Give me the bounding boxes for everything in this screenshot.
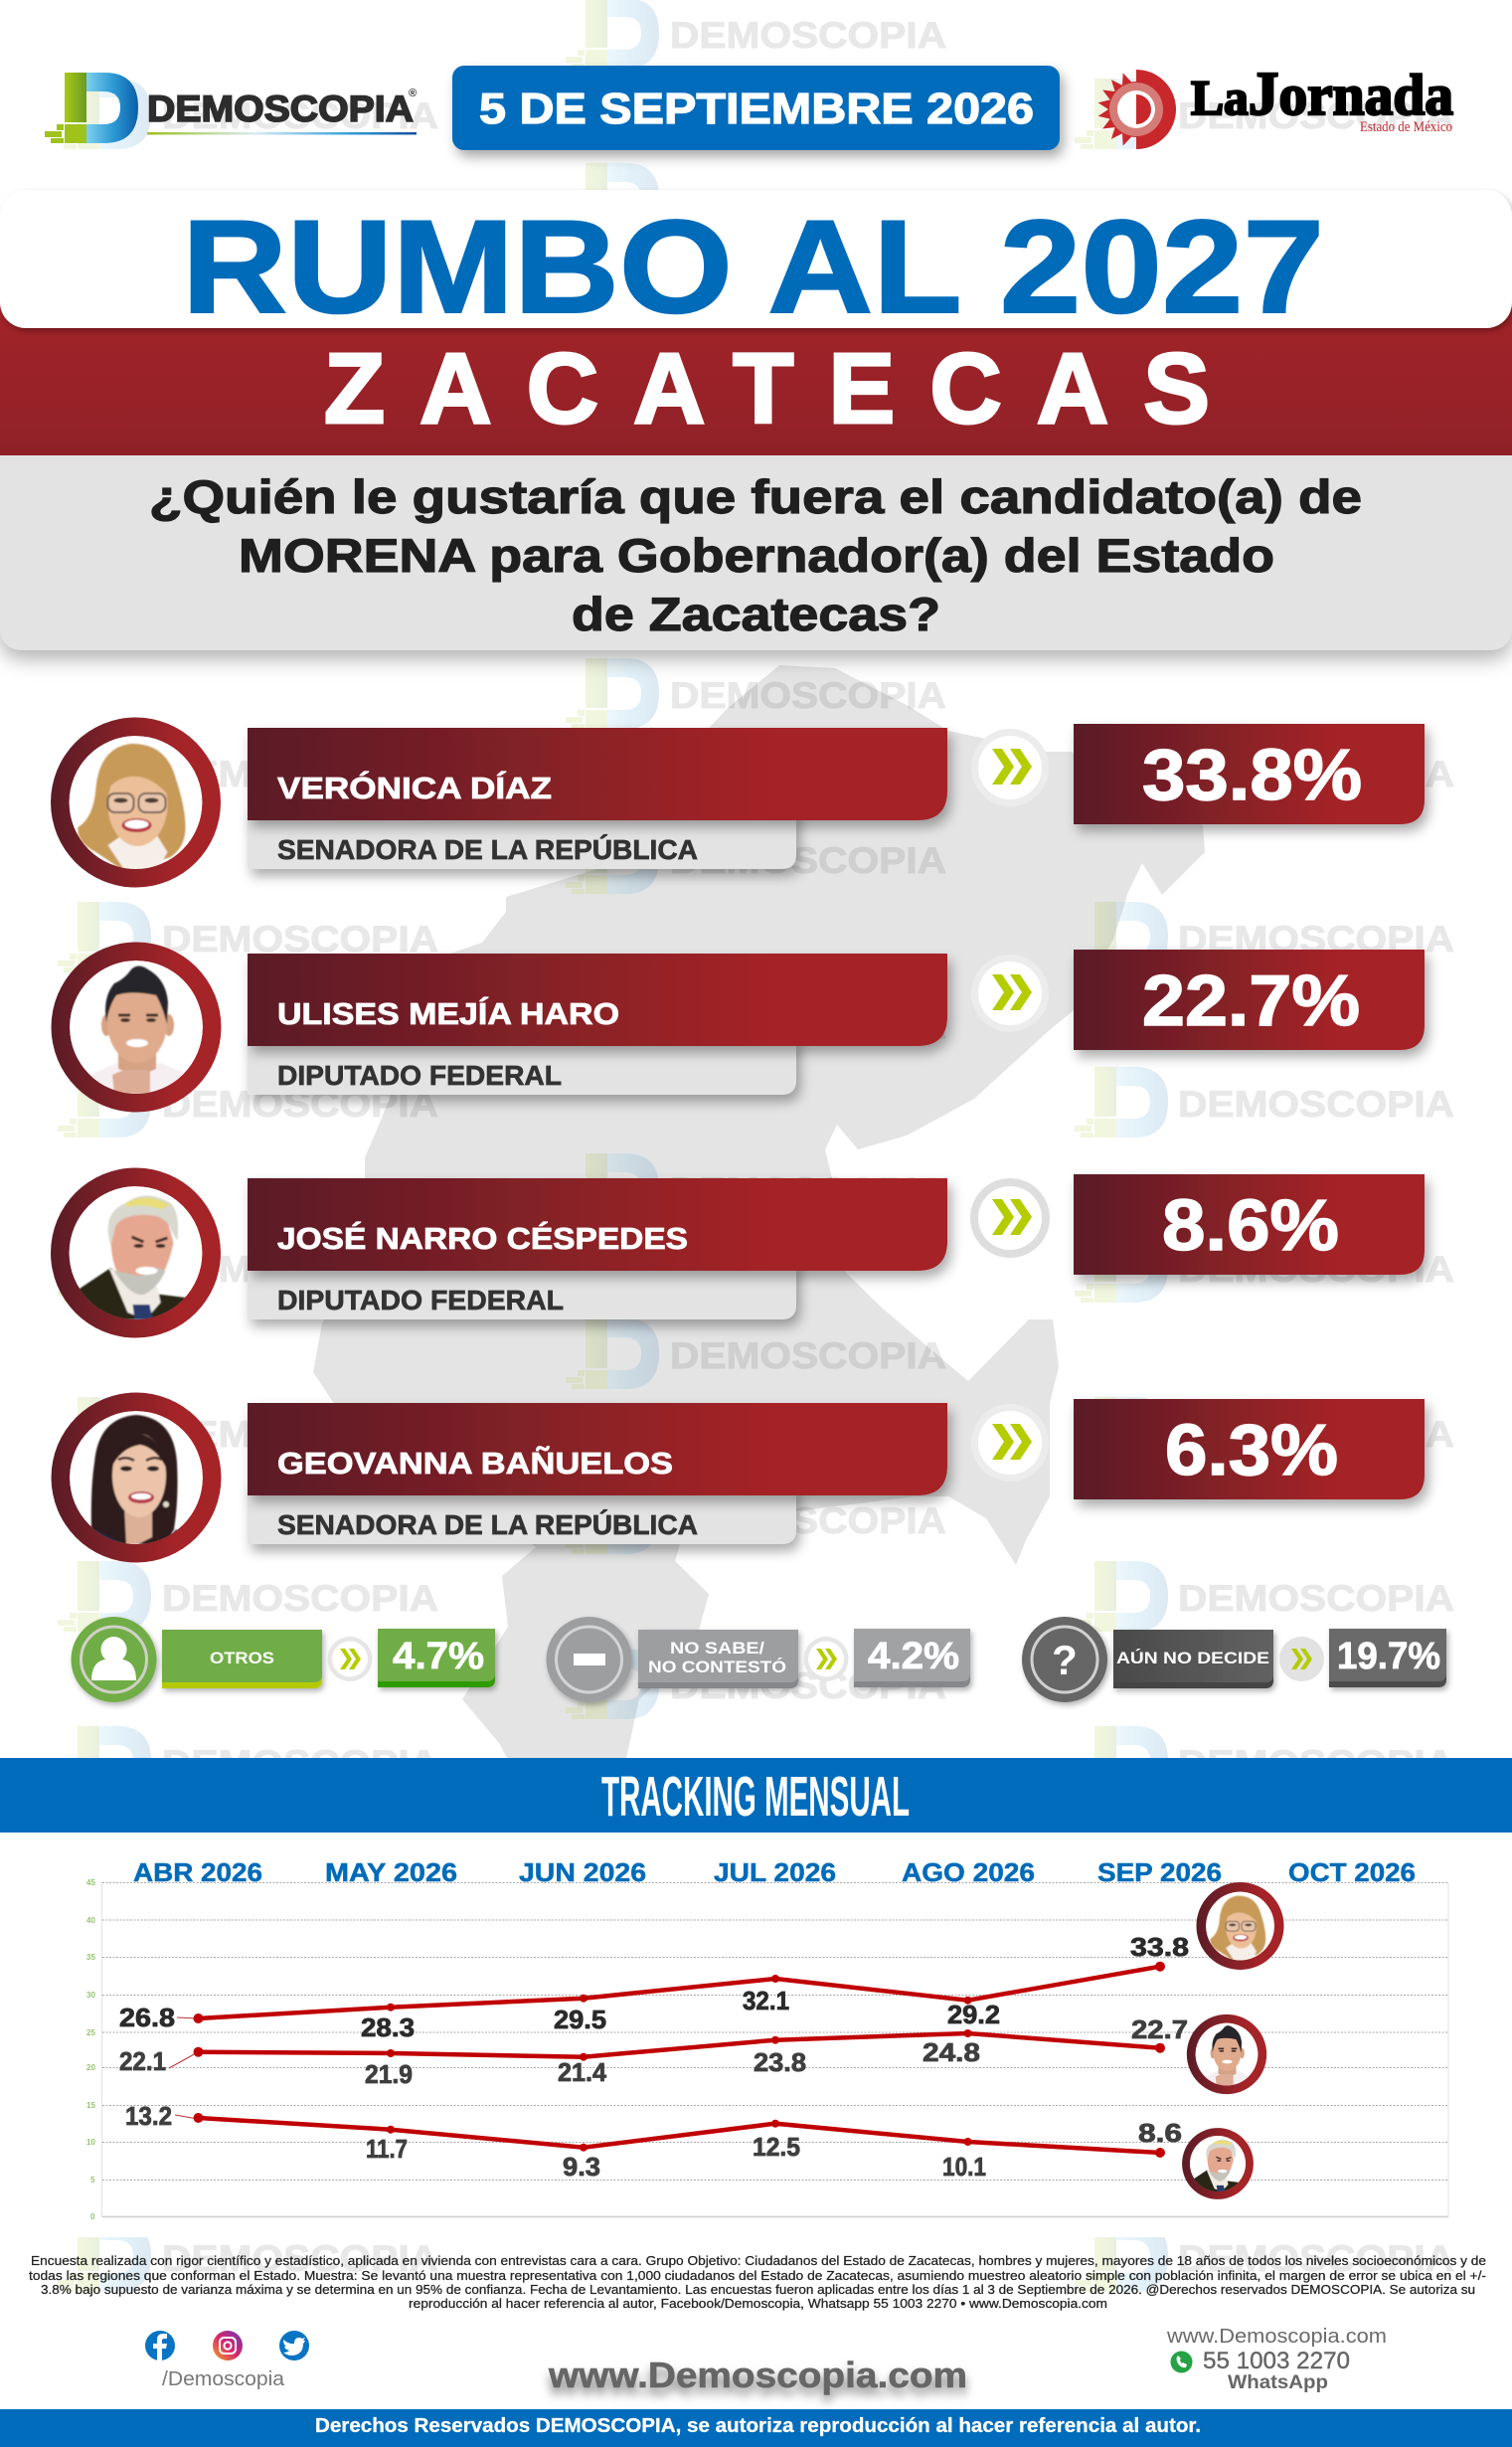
y axis labels: 45 [86,1878,95,1887]
watermark grid: DEMOSCOPIA [1178,754,1454,794]
sub bar: role [248,810,796,869]
series: José Narro: 8.6 [1138,2118,1182,2148]
question text: ¿Quién le gustaría que fuera el candidato(a) de [149,470,1362,523]
portrait: José Narro small [1182,2128,1254,2199]
y axis labels: 0 [90,2212,95,2221]
series: Verónica Díaz: 26.8 [119,2003,175,2032]
candidate row: José Narro Céspedes [51,1167,1425,1338]
icon: question mark: ? [1052,1637,1078,1683]
watermark grid: DEMOSCOPIA [162,919,438,960]
watermark grid: DEMOSCOPIA [162,95,438,136]
series: Ulises Mejía: 24.8 [923,2037,980,2067]
sub bar: role [248,1486,796,1544]
watermark grid: DEMOSCOPIA [1178,2238,1454,2279]
panel: main title: RUMBO AL 2027 [182,194,1324,341]
icon: whatsapp [1171,2351,1193,2372]
portrait ring [51,1167,221,1338]
series: José Narro: 12.5 [753,2132,800,2162]
watermark grid: DEMOSCOPIA [670,15,946,56]
watermark grid: DEMOSCOPIA [670,1005,946,1046]
methodology note: reproducción al hacer referencia al autor, Facebook/Demoscopia, Whatsapp 55 1003 2270 • www.Demoscopia.com [409,2296,1107,2311]
percentage [1074,1174,1425,1275]
y axis labels: 40 [86,1916,95,1925]
watermark grid: DEMOSCOPIA [162,2238,438,2279]
name bar: JOSÉ NARRO CÉSPEDES [277,1221,688,1256]
name bar [248,1178,947,1271]
y axis labels: 20 [86,2063,95,2072]
percentage: 33.8% [1142,736,1362,815]
y axis labels [86,1878,95,2221]
series: Ulises Mejía: 21.9 [365,2059,413,2089]
chevron [970,1178,1050,1258]
watermark grid: DEMOSCOPIA [670,1335,946,1376]
percentage: 6.3% [1165,1411,1338,1490]
month labels: MAY 2026 [325,1857,457,1887]
month labels: ABR 2026 [133,1857,262,1887]
website centre: www.Demoscopia.com [548,2355,967,2395]
name bar: GEOVANNA BAÑUELOS [277,1446,673,1481]
icon: facebook [145,2331,175,2360]
watermark grid: DEMOSCOPIA [162,754,438,794]
grid [102,1883,1448,2180]
value box [854,1629,970,1687]
series: José Narro: 11.7 [366,2134,408,2164]
series: José Narro [125,2101,1182,2182]
name bar [248,728,947,820]
value box [1329,1629,1446,1687]
leader lines [169,2017,198,2119]
series: Verónica Díaz: 28.3 [361,2012,415,2042]
chevron [971,729,1049,806]
watermark grid: DEMOSCOPIA [1178,1414,1454,1455]
watermark grid: DEMOSCOPIA [670,1665,946,1706]
label box: AÚN NO DECIDE [1116,1649,1269,1667]
question text [149,470,1362,640]
candidate row: Verónica Díaz [51,718,1425,887]
portrait ring [52,943,221,1112]
chevron [1279,1637,1324,1681]
watermark grid: DEMOSCOPIA [162,1084,438,1125]
y axis labels: 30 [86,1991,95,2000]
y axis labels: 35 [86,1953,95,1962]
logo: Demoscopia: ® [409,87,417,99]
sub bar: role: DIPUTADO FEDERAL [277,1285,564,1315]
contact block: WhatsApp [1228,2372,1328,2393]
watermark grid: DEMOSCOPIA [1178,1743,1454,1784]
logo: La Jornada: LaJornada [1191,61,1453,128]
question text: de Zacatecas? [572,588,940,640]
series: José Narro: 10.1 [942,2152,986,2182]
y axis labels: 5 [90,2176,95,2185]
month labels [133,1857,1416,1887]
y axis labels: 25 [86,2028,95,2037]
icon: question mark [1022,1617,1107,1702]
watermark grid: DEMOSCOPIA [670,675,946,716]
name bar [248,954,947,1046]
watermark grid: DEMOSCOPIA [1178,95,1454,136]
percentage: 22.7% [1142,961,1360,1041]
series: José Narro: 9.3 [563,2152,600,2182]
website centre: www.Demoscopia.com [548,2361,967,2402]
portrait: Ulises Mejía small [1187,2014,1266,2094]
series: Verónica Díaz: 29.2 [947,2000,1000,2029]
watermark grid: DEMOSCOPIA [1178,1249,1454,1290]
footer band: Derechos Reservados DEMOSCOPIA, se autoriza reproducción al hacer referencia al autor. [315,2415,1201,2437]
chart background [0,1833,1512,2237]
panel: state name band [0,268,1512,455]
watermark grid: DEMOSCOPIA [1178,919,1454,960]
month labels: SEP 2026 [1097,1857,1222,1887]
series: Ulises Mejía: 22.7 [1131,2014,1188,2044]
value box: 4.7% [393,1636,484,1677]
portrait ring [52,1392,221,1563]
month labels: JUN 2026 [519,1857,646,1887]
icon: twitter [279,2331,309,2360]
series: José Narro: 13.2 [125,2101,172,2131]
name bar: ULISES MEJÍA HARO [277,996,619,1031]
percentage [1074,1399,1425,1499]
logo: Demoscopia: DEMOSCOPIA [147,88,414,129]
series: Verónica Díaz: 33.8 [1130,1932,1189,1962]
series: Ulises Mejía: 22.1 [119,2046,166,2076]
watermark grid: DEMOSCOPIA [162,1578,438,1619]
name bar [248,1403,947,1495]
portrait ring [51,718,221,887]
logo: La Jornada [1098,61,1453,149]
social icons [145,2331,309,2390]
sub bar: role: SENADORA DE LA REPÚBLICA [277,834,698,865]
logo: La Jornada: Estado de México [1360,119,1452,135]
candidate row: Geovanna Bañuelos [52,1392,1425,1563]
contact block: www.Demoscopia.com [1166,2326,1387,2348]
label box: NO CONTESTÓ [648,1658,786,1676]
label box [162,1630,322,1688]
summary item: Aún no decide [1022,1617,1446,1702]
icon: minus [547,1617,632,1702]
watermark grid: DEMOSCOPIA [1178,1084,1454,1125]
percentage [1074,950,1425,1050]
methodology note: Encuesta realizada con rigor científico y estadístico, aplicada en vivienda con entrevistas cara a cara. Grupo Objetivo: Ciudadanos del Estado de Zacatecas, hombres y mujeres, mayores de 18 años de todos los niveles socioeconómicos y de [31,2253,1486,2268]
chevron [971,1404,1049,1482]
tracking heading band [0,1758,1512,1833]
label box: OTROS [210,1649,274,1667]
icon: instagram [213,2331,243,2360]
y axis labels: 15 [86,2101,95,2110]
sub bar: role [248,1036,796,1095]
series: Verónica Díaz [119,1932,1189,2042]
watermark grid: DEMOSCOPIA [162,1743,438,1784]
watermark grid: DEMOSCOPIA [1178,1578,1454,1619]
watermark grid: DEMOSCOPIA [670,1170,946,1211]
candidate row: Ulises Mejía Haro [52,943,1425,1112]
series: Verónica Díaz: 29.5 [554,2005,606,2034]
icon: person [72,1617,157,1702]
percentage [1074,724,1425,824]
month labels: AGO 2026 [902,1857,1035,1887]
methodology note: 3.8% bajo supuesto de varianza máxima y se determina en un 95% de confianza. Fecha de Levantamiento. Las encuestas fueron aplicadas entre los días 1 al 3 de Septiembre de 2026. @Derechos reservados DEMOSCOPIA. Se autoriza su [41,2282,1475,2297]
summary item: Otros [72,1617,495,1702]
watermark grid: DEMOSCOPIA [670,840,946,881]
chevron [971,955,1049,1032]
value box [378,1629,495,1687]
value box: 4.2% [868,1636,959,1677]
label box [638,1630,798,1688]
series: Ulises Mejía: 21.4 [558,2057,607,2087]
tracking heading band: TRACKING MENSUAL [601,1765,910,1829]
series: Ulises Mejía [119,2014,1188,2089]
sub bar: role: DIPUTADO FEDERAL [277,1060,562,1091]
watermark grid: DEMOSCOPIA [670,1500,946,1541]
watermark grid: DEMOSCOPIA [162,1414,438,1455]
name bar: VERÓNICA DÍAZ [277,770,552,805]
question text: MORENA para Gobernador(a) del Estado [239,529,1274,582]
panel: question (grey) [0,437,1512,650]
panel: state name band: ZACATECAS [324,333,1210,444]
chevron [328,1637,372,1681]
logo: Demoscopia [45,73,417,143]
handle: /Demoscopia [162,2368,285,2390]
sub bar: role: SENADORA DE LA REPÚBLICA [277,1509,698,1540]
methodology note [29,2253,1486,2311]
y axis labels: 10 [86,2138,95,2147]
month labels: OCT 2026 [1288,1857,1416,1887]
value box: 19.7% [1337,1636,1440,1677]
month labels: JUL 2026 [714,1857,836,1887]
footer band [0,2409,1512,2447]
watermark grid: DEMOSCOPIA [162,1249,438,1290]
methodology note: todas las regiones que conforman el Estado. Muestra: Se levantó una muestra representativa con 1,000 ciudadanos del Estado de Zacatecas, asumiendo muestreo aleatorio simple con población infinita, el margen de error se ubica en el +/- [29,2268,1486,2283]
contact block [1166,2326,1387,2393]
map silhouette of Zacatecas [313,665,1205,1758]
series: Verónica Díaz: 32.1 [743,1986,789,2015]
series: Ulises Mejía: 23.8 [754,2047,806,2077]
date pill [452,66,1060,150]
sub bar: role [248,1261,796,1319]
line chart [86,1878,1448,2221]
chevron [803,1637,849,1681]
date pill: 5 DE SEPTIEMBRE 2026 [479,85,1034,133]
contact block: 55 1003 2270 [1203,2348,1350,2374]
label box: NO SABE/ [670,1639,764,1658]
portrait: Verónica Díaz small [1196,1882,1284,1970]
label box [1113,1630,1273,1688]
percentage: 8.6% [1162,1186,1339,1266]
panel: main title [0,190,1512,341]
summary item: No sabe / No contestó [547,1617,970,1702]
